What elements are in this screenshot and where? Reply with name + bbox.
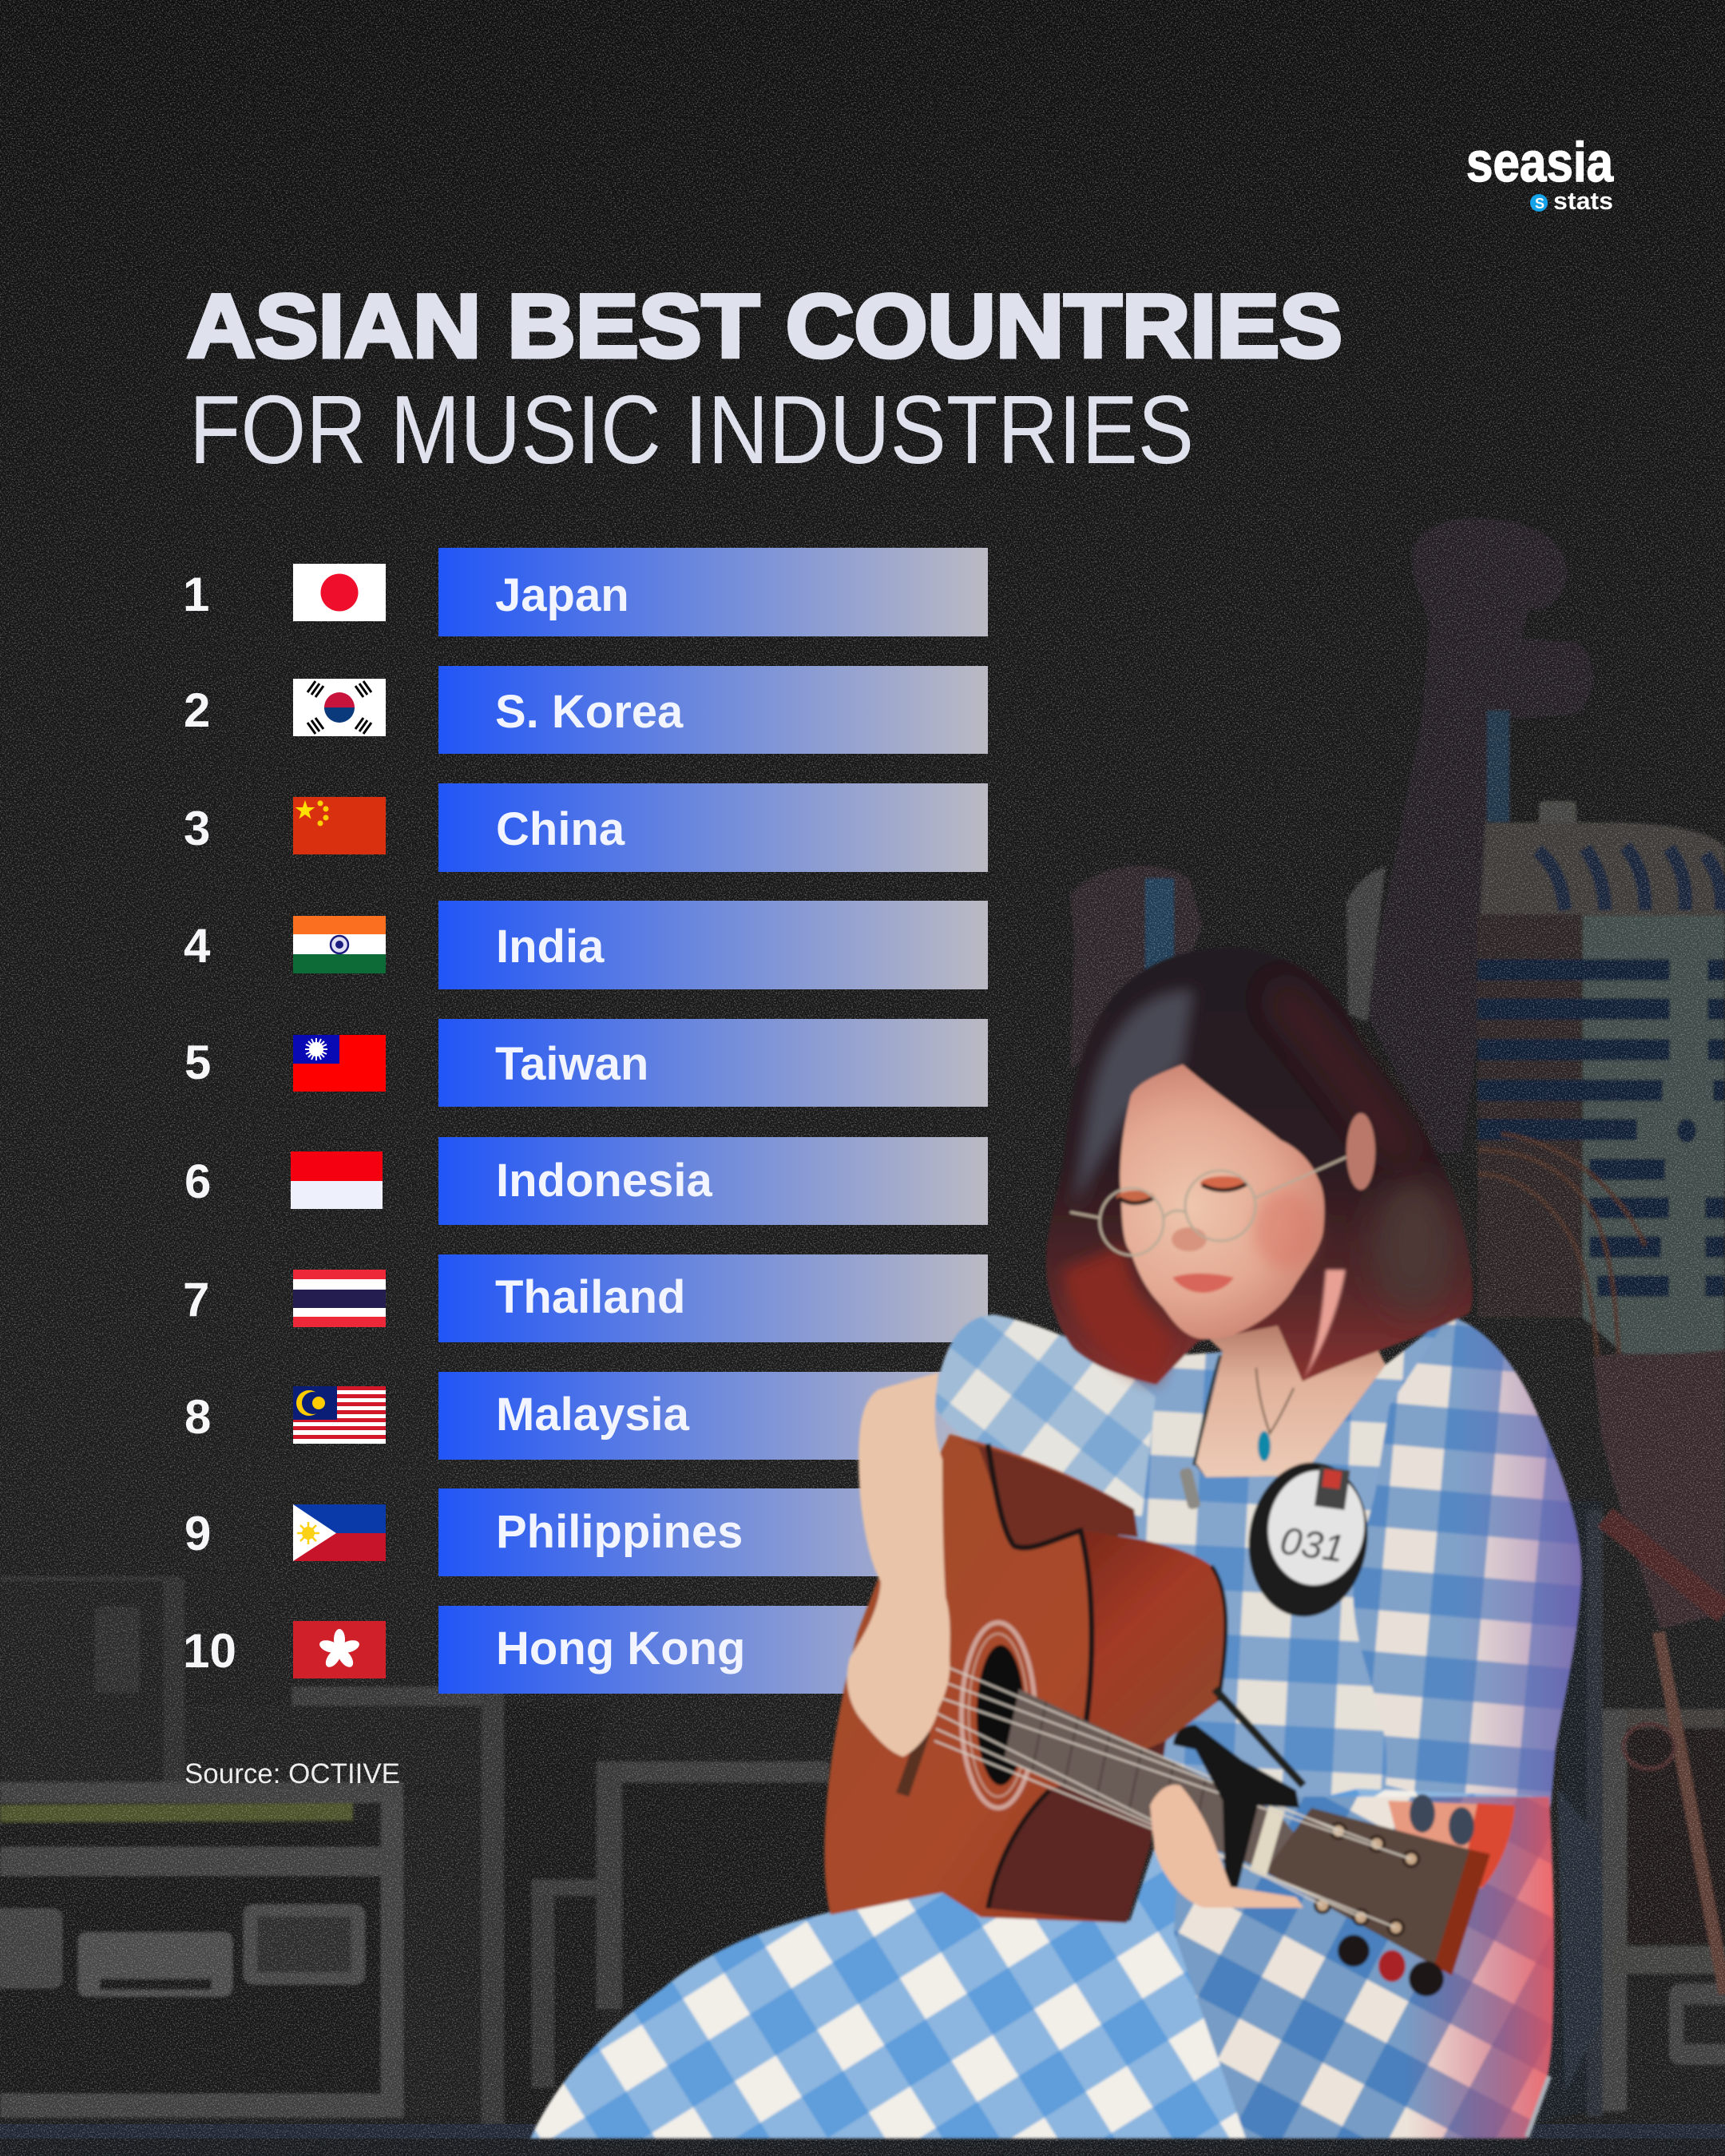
neck and chest [1178, 1310, 1386, 1477]
ghost image: vintage microphone [1477, 801, 1725, 1629]
ghost image: dark chair and right flight case [1533, 1501, 1725, 2124]
logo: seasia stats [1466, 131, 1614, 215]
row 8: Malaysia [184, 1372, 988, 1460]
title [187, 276, 1342, 484]
row 3: China: China [496, 803, 625, 855]
name badge: 031 [1278, 1520, 1346, 1571]
row 8: Malaysia: Malaysia [496, 1389, 690, 1441]
row 8: Malaysia: 8 [184, 1390, 211, 1444]
guitar strings [934, 1665, 1411, 1928]
row 7: Thailand [183, 1254, 988, 1342]
row 7: Thailand: Thailand [495, 1271, 685, 1323]
row 5: Taiwan: 5 [184, 1036, 211, 1089]
row 9: Philippines: 9 [184, 1507, 211, 1560]
ranking list [183, 548, 988, 1694]
source note: Source: OCTIIVE [184, 1758, 400, 1789]
left arm and picking hand [847, 1373, 950, 1757]
row 6: Indonesia: Indonesia [496, 1155, 712, 1207]
forearm behind headstock [1388, 1801, 1515, 1888]
dress torso [1118, 1316, 1477, 1916]
left shoulder puff sleeve [934, 1314, 1158, 1517]
guitar body [824, 1434, 1226, 1923]
fretboard and neck [1004, 1689, 1294, 1873]
bridge saddle [896, 1730, 930, 1797]
row 9: Philippines: Philippines [496, 1506, 743, 1558]
row 4: India: India [496, 921, 605, 973]
row 2: S. Korea: S. Korea [495, 686, 684, 738]
row 6: Indonesia: 6 [184, 1155, 211, 1208]
capo [1173, 1725, 1299, 1889]
bottom floor band [0, 2124, 1725, 2156]
round glasses [1070, 1157, 1346, 1255]
row 4: India [184, 901, 988, 989]
headstock [1250, 1794, 1490, 1996]
row 1: Japan [183, 548, 988, 636]
row 6: Indonesia [184, 1137, 988, 1225]
logo: seasia stats: S [1535, 196, 1545, 212]
row 5: Taiwan [184, 1019, 988, 1107]
title: FOR MUSIC INDUSTRIES [189, 375, 1194, 484]
skirt [530, 1789, 1557, 2140]
row 4: India: 4 [184, 919, 211, 973]
row 3: China: 3 [184, 802, 210, 855]
row 10: Hong Kong: Hong Kong [496, 1623, 745, 1674]
row 1: Japan: Japan [495, 569, 629, 621]
row 2: S. Korea [184, 666, 988, 754]
photo: woman playing guitar [530, 947, 1589, 2140]
row 10: Hong Kong: 10 [183, 1624, 236, 1678]
facial features [1116, 1176, 1318, 1293]
ear [1346, 1113, 1375, 1190]
microphone cable and clip [1179, 1355, 1220, 1510]
fretting hand [1150, 1785, 1303, 1908]
ghost image: flight cases [0, 1576, 846, 2124]
face [1120, 1064, 1324, 1339]
necklace [1256, 1368, 1294, 1461]
logo: seasia stats: seasia [1466, 131, 1614, 193]
right sleeve [1353, 1310, 1589, 1813]
hair [1046, 947, 1473, 1385]
row 10: Hong Kong [183, 1606, 988, 1694]
row 1: Japan: 1 [183, 568, 209, 621]
row 9: Philippines [184, 1488, 988, 1576]
name badge [1239, 1455, 1378, 1624]
row 3: China [184, 783, 988, 872]
ghost image: cello scroll, neck and small violin [1070, 517, 1592, 1154]
row 2: S. Korea: 2 [184, 684, 210, 737]
logo: seasia stats: stats [1553, 187, 1613, 215]
row 5: Taiwan: Taiwan [495, 1038, 648, 1090]
row 7: Thailand: 7 [183, 1273, 209, 1326]
title: ASIAN BEST COUNTRIES [187, 276, 1342, 376]
